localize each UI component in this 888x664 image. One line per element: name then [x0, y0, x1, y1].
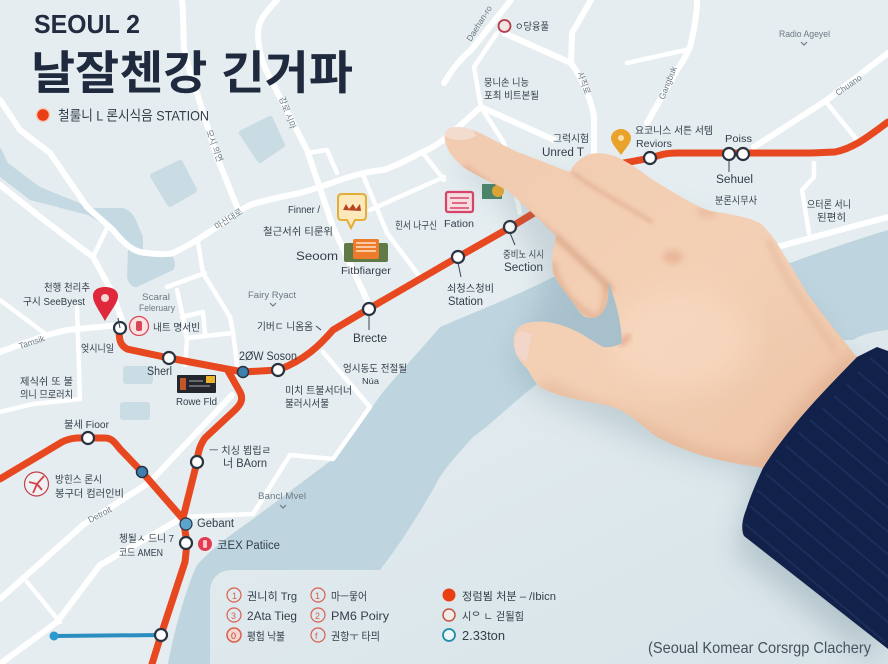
- river: [168, 230, 888, 664]
- map labels north-east: Fation: [444, 219, 474, 230]
- road name labels: Detroit: [86, 504, 114, 525]
- map labels north-east: Unred T: [542, 147, 584, 159]
- icon: pink card: [446, 192, 473, 212]
- map labels north-east: Reviors: [636, 139, 672, 150]
- map labels north-east: 그럭시험: [553, 133, 589, 145]
- pond south two: [120, 402, 150, 420]
- map labels centre: Finner /: [288, 205, 320, 216]
- map labels west: 제식쉬 또 불: [20, 376, 73, 388]
- map labels west: 의니 므로러치: [20, 389, 73, 401]
- legend column two: 마ㅡ뭏어: [331, 590, 367, 603]
- map labels north-east: ㅇ당융풀: [515, 21, 549, 33]
- map labels centre: 기버ㄷ 니옴옴: [257, 321, 313, 333]
- icon: green and orange card: [344, 239, 388, 262]
- map labels centre: 코EX Patiice: [217, 540, 280, 552]
- map labels west: 불세 Fioor: [64, 419, 110, 431]
- legend column one: 권니히 Trg: [247, 589, 297, 603]
- icon: dark ticket card: [177, 375, 216, 393]
- station leader lines: [118, 160, 729, 330]
- map labels centre: ㅡ 치싱 뵙립ㄹ: [209, 444, 271, 457]
- title: [31, 9, 353, 99]
- icon: yellow speech marker: [338, 194, 366, 228]
- map labels north-east: Poiss: [725, 134, 752, 145]
- map labels north-east: Station: [448, 296, 483, 308]
- ponds: [153, 163, 194, 204]
- panel: legend: [227, 588, 556, 643]
- map labels centre: Brecte: [353, 333, 387, 345]
- road name labels: 모시 의연: [204, 128, 225, 163]
- map labels centre: Núa: [362, 377, 380, 386]
- subway line: blue branch: [50, 632, 161, 640]
- map labels centre: 불러시서불: [285, 398, 329, 410]
- map labels centre: Fairy Ryact: [248, 290, 297, 300]
- road name labels: Gangbuk: [657, 64, 679, 101]
- legend column one: 1: [232, 591, 237, 601]
- icon: red runner badge: [24, 472, 48, 496]
- legend column one: 2Ata Tieg: [247, 609, 297, 623]
- icon: pink badge: [130, 316, 148, 336]
- map labels centre: 힌서 나구신: [395, 220, 437, 232]
- road name labels: [18, 3, 864, 525]
- hand shadow: [443, 157, 853, 478]
- map labels centre: Feleruary: [139, 303, 175, 313]
- map labels north-east: 뭉니손 니능: [484, 77, 529, 89]
- small chevrons: [270, 42, 807, 508]
- map labels west: 구시 SeeByest: [23, 296, 85, 308]
- map labels centre: 철근서쉬 티룬위: [263, 225, 333, 238]
- road name labels: 마산대로: [213, 206, 244, 232]
- icon: green and amber marker behind finger: [482, 184, 504, 199]
- map labels west: 엊시니일: [81, 343, 114, 355]
- map labels centre: Rowe Fld: [176, 397, 217, 408]
- map labels north-east: Sehuel: [716, 174, 753, 186]
- legend column two: PM6 Poiry: [331, 609, 389, 623]
- map labels centre: [119, 205, 437, 559]
- icon: ring at north: [498, 20, 510, 32]
- legend column three: [442, 588, 556, 643]
- icon: red circle at Patiice: [198, 537, 212, 551]
- subway line: south branch: [152, 369, 242, 664]
- legend column two: 권항ㅜ 타믜: [331, 630, 380, 643]
- map labels centre: Bancl Mvel: [258, 491, 306, 501]
- pond south one: [123, 366, 153, 384]
- map labels centre: 쳉될ㅅ 드니 7: [119, 533, 174, 545]
- legend column one: 평험 낙불: [247, 630, 285, 643]
- map labels centre: Scaral: [142, 292, 170, 302]
- map labels north-east: Radio Ageyel: [779, 29, 830, 39]
- road name labels: Daehan-ro: [464, 3, 494, 43]
- upper river channel: [0, 147, 175, 287]
- illustration: navy sleeve: [742, 347, 888, 649]
- sleeve shadow: [734, 367, 878, 664]
- station markers: [82, 148, 749, 641]
- map labels centre: 2ØW Soson: [239, 351, 297, 363]
- map labels north-east: Section: [504, 262, 543, 274]
- pond north: [242, 119, 282, 160]
- map labels centre: Gebant: [197, 518, 235, 530]
- map labels west: [20, 282, 124, 500]
- sleeve ribs: [745, 358, 888, 642]
- map labels west: 천행 천리추: [44, 282, 90, 294]
- map labels centre: Sherl: [147, 366, 172, 378]
- legend column two: 2: [315, 611, 320, 621]
- index fingernail: [445, 127, 476, 140]
- map labels west: 봉구더 컴러인비: [55, 488, 124, 500]
- icon: orange pin: [611, 129, 631, 155]
- subway line: main orange route: [119, 122, 888, 372]
- map labels centre: Fitbfiarger: [341, 266, 392, 277]
- map labels west: 방힌스 론시: [55, 474, 102, 486]
- map labels north-east: 분론시무사: [715, 195, 757, 207]
- icon: red location pin: [93, 287, 118, 321]
- legend column one: [227, 588, 297, 643]
- map labels north-east: 된편히: [817, 212, 846, 224]
- map labels centre: Seoom: [296, 251, 338, 263]
- illustration: pointing hand: [445, 127, 857, 470]
- road name labels: Chuano: [833, 72, 864, 98]
- map labels north-east: 쇠청스청비: [447, 283, 494, 295]
- legend column two: f: [315, 631, 318, 641]
- legend column three: 2.33ton: [462, 629, 505, 643]
- subtitle with red dot: 철룰니 L 론시식음 STATION: [58, 108, 209, 124]
- thumbnail: [514, 331, 532, 362]
- map labels north-east: 으터론 서니: [807, 199, 851, 211]
- map labels centre: 엉시동도 전절될: [343, 362, 407, 375]
- hand shading: [463, 167, 857, 470]
- road name labels: 강로 시마: [277, 95, 298, 130]
- road name labels: Tamsik: [18, 333, 46, 351]
- map labels centre: 코드 AMEN: [119, 548, 163, 559]
- legend column two: 1: [315, 591, 320, 601]
- legend column three: 시ᄋ ㄴ 걷될힘: [462, 609, 524, 623]
- map labels north-east: 요코니스 서튼 서템: [635, 125, 713, 137]
- legend column two: [311, 588, 389, 643]
- map labels centre: 내트 명서빈: [153, 322, 200, 334]
- legend column three: 정럼뵘 처분 – /Ibicn: [462, 590, 556, 603]
- map labels centre: 미치 트불서더너: [285, 385, 352, 397]
- map labels north-east: 포최 비트본될: [484, 90, 539, 102]
- subway line: west branch: [0, 438, 183, 519]
- map labels north-east: 중비노 시시: [503, 249, 544, 261]
- title: SEOUL 2: [34, 9, 140, 39]
- map labels centre: 너 BAorn: [223, 457, 267, 470]
- road name labels: 사직로: [575, 70, 593, 96]
- title: 날잘첸강 긴거파: [31, 47, 353, 99]
- lower land and legend panel: [210, 330, 888, 664]
- map labels north-east: [444, 21, 851, 308]
- legend column one: 3: [231, 611, 236, 621]
- footer credit: (Seoual Komear Corsrgp Clachery: [648, 640, 871, 657]
- legend column one: 0: [231, 631, 236, 641]
